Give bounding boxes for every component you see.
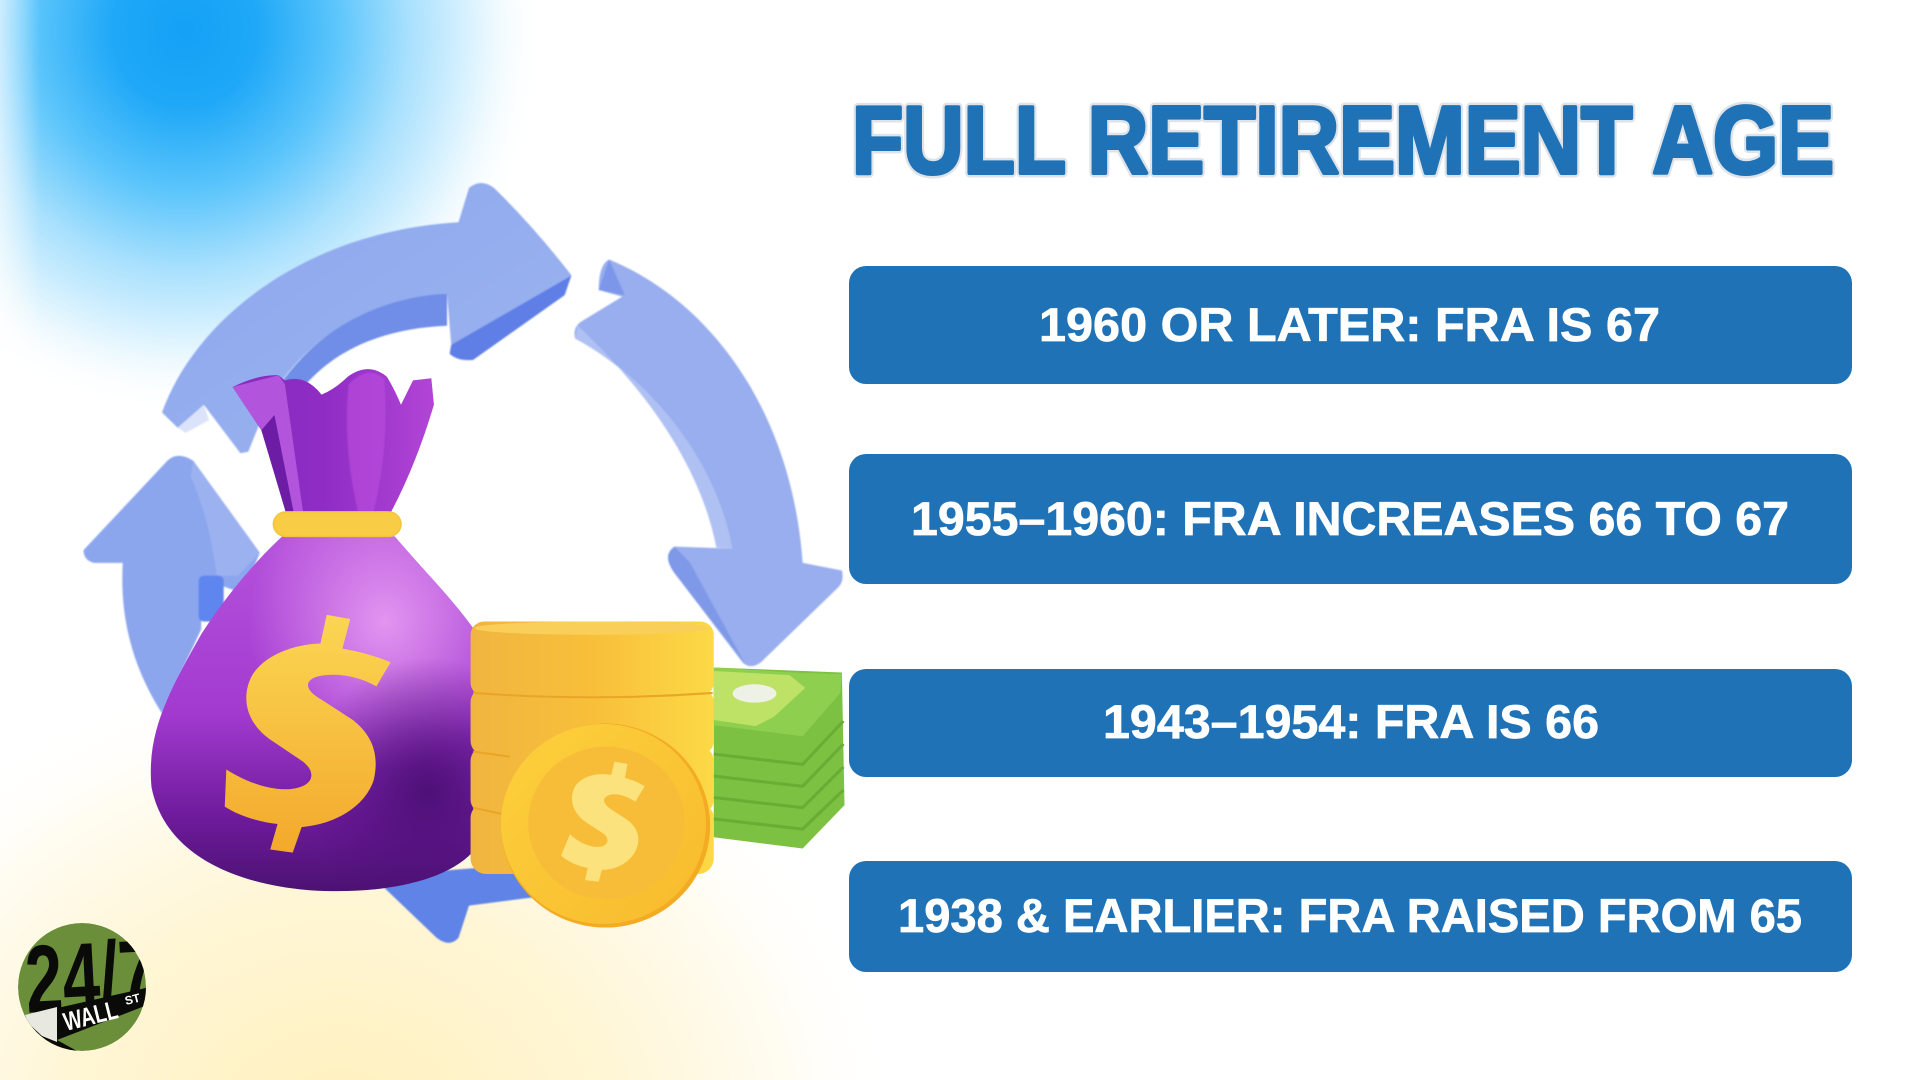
bag shadow (151, 536, 476, 891)
logo st: ST (123, 990, 142, 1008)
arrow: top cycle arrow (162, 183, 571, 453)
bag ruffle fold (261, 415, 294, 513)
logo street name: WALL (60, 994, 121, 1037)
logo building (25, 1007, 57, 1042)
bag body (151, 536, 476, 891)
bag ruffle left panel (233, 375, 303, 513)
arrow: bottom cycle arrow (383, 864, 536, 943)
illustration: money bag, coins and cash with cycle arrows (84, 183, 844, 943)
label: 1955 to 1960: 1955–1960: FRA INCREASES 66 TO 67 (911, 492, 1789, 545)
icon: cash stack (714, 667, 844, 848)
panel: 1955 to 1960 (849, 454, 1852, 584)
label: 1943 to 1954: 1943–1954: FRA IS 66 (1103, 695, 1599, 748)
title (852, 87, 1834, 194)
arrow: left cycle arrow (84, 456, 260, 713)
bag dollar sign (225, 615, 391, 853)
bag highlight (151, 536, 476, 891)
panel: 1943 to 1954 (849, 669, 1852, 777)
logo disc (18, 923, 146, 1051)
label: 1938 and earlier: 1938 & EARLIER: FRA RAISED FROM 65 (898, 889, 1802, 942)
logo street sign band (24, 988, 146, 1051)
arrow: right cycle arrow (575, 259, 843, 666)
panel: 1960 or later (849, 266, 1852, 384)
bag ruffle highlight (347, 373, 386, 512)
logo number: 24/7 (23, 920, 158, 1034)
panel: 1938 and earlier (849, 861, 1852, 972)
icon: front gold coin (501, 724, 710, 928)
icon: coin stack (471, 622, 714, 874)
cash inner note (714, 671, 805, 726)
bag ring (273, 512, 401, 536)
bag ruffle (233, 369, 434, 513)
cash white seal (733, 684, 777, 703)
cash sheet edges (714, 721, 843, 829)
logo: 24/7 Wall St badge (18, 923, 146, 1051)
icon: money bag (151, 369, 476, 891)
cash top note (714, 667, 842, 736)
label: 1960 or later: 1960 OR LATER: FRA IS 67 (1039, 298, 1660, 351)
stack seams (473, 693, 713, 814)
coin dollar sign (561, 762, 645, 882)
